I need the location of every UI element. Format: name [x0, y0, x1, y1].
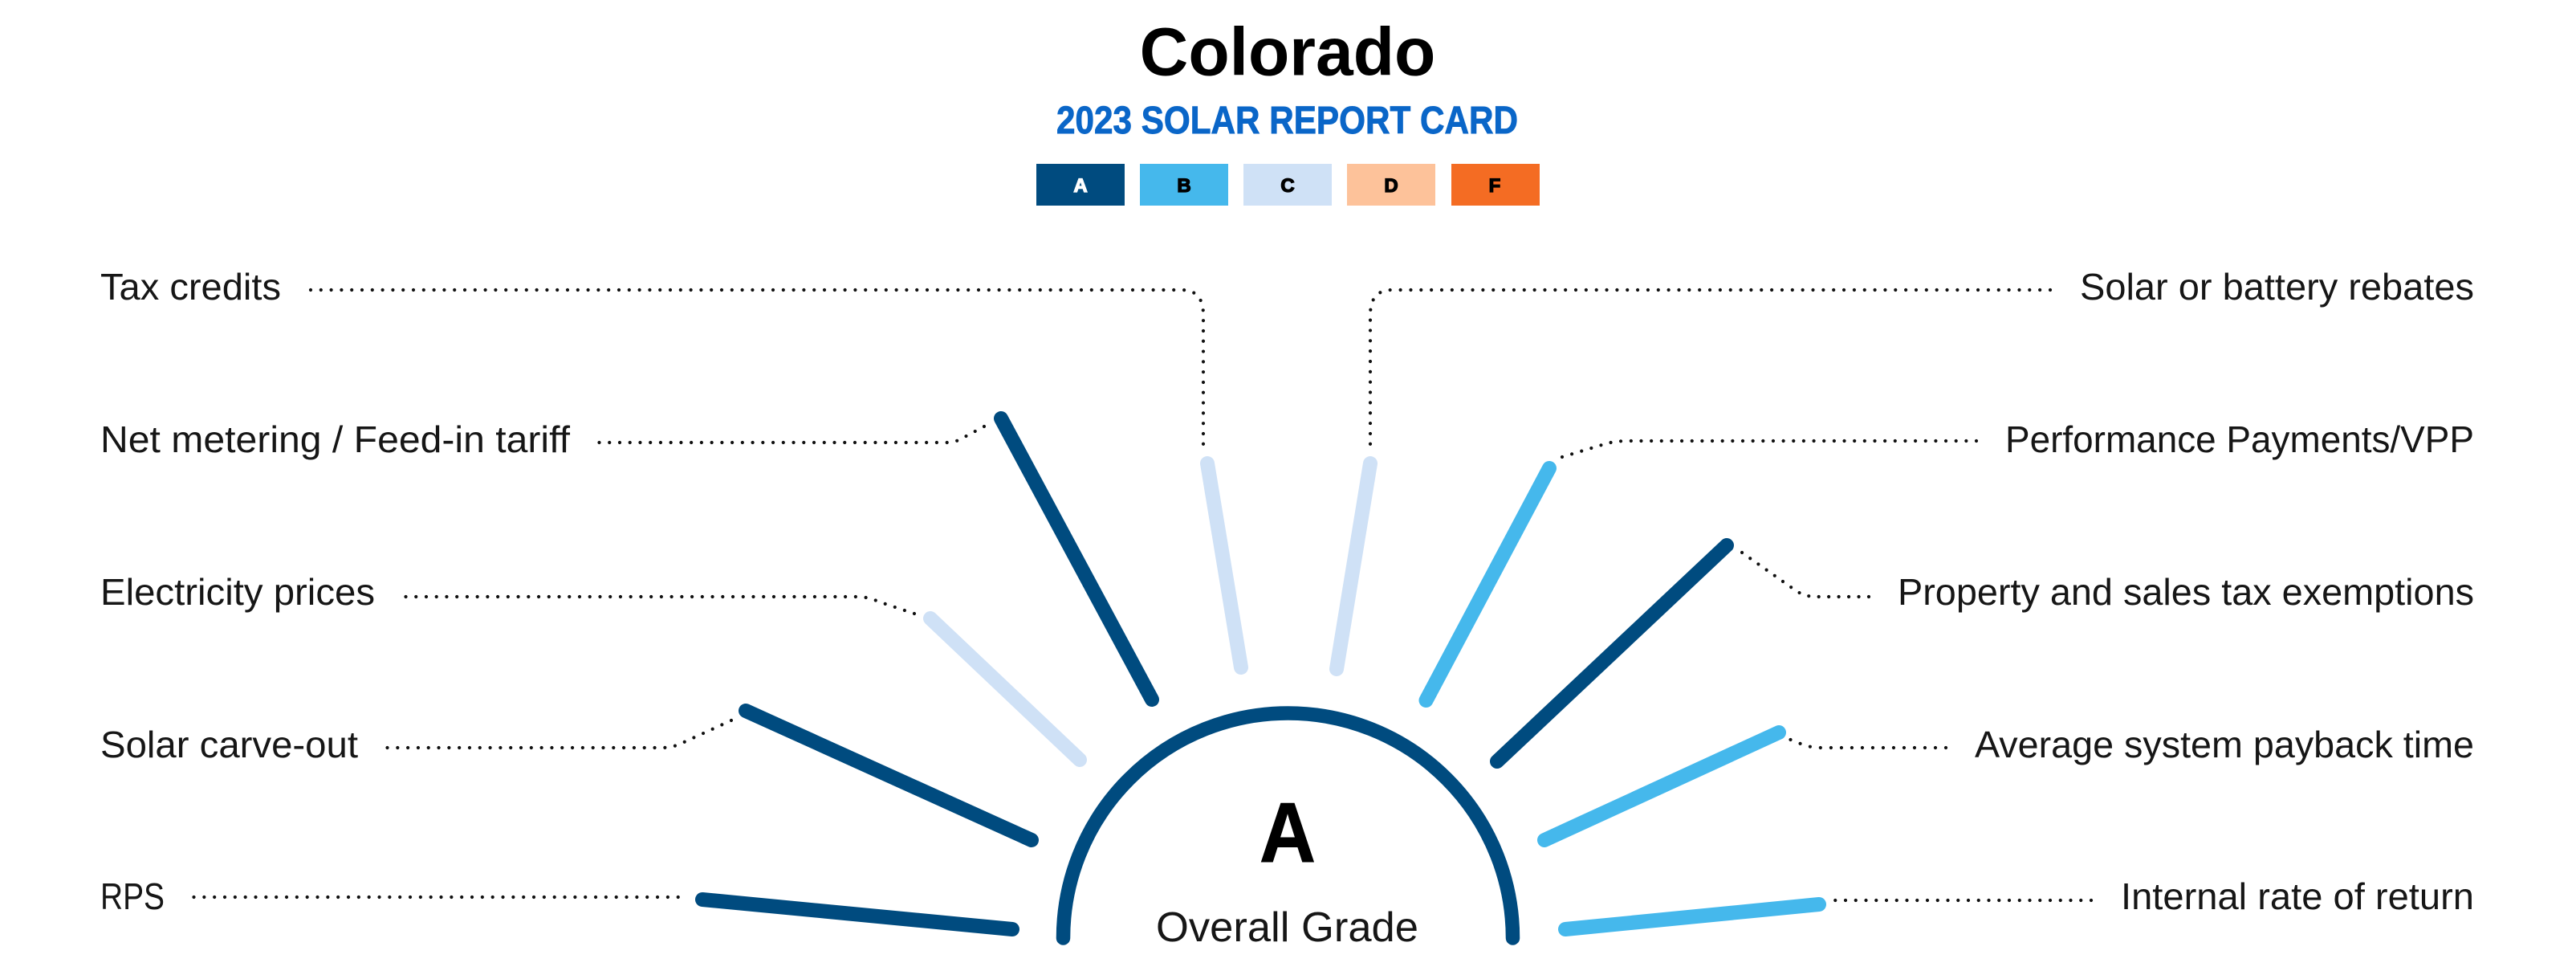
item: Internal rate of return — [1565, 875, 2474, 929]
leader line — [1834, 899, 2091, 902]
legend: A: A — [1073, 175, 1088, 197]
ray: grade B — [1565, 904, 1819, 929]
item: Net metering / Feed-in tariff — [100, 418, 1152, 700]
legend: D: D — [1384, 175, 1398, 197]
leader line — [599, 426, 984, 443]
item: Property and sales tax exemptions — [1497, 545, 2474, 761]
label: Performance Payments/VPP — [2005, 418, 2474, 460]
leader line — [387, 720, 731, 748]
label: Average system payback time — [1975, 724, 2474, 765]
ray: grade A — [1001, 418, 1152, 700]
legend: C: C — [1280, 175, 1295, 197]
label: Internal rate of return — [2121, 875, 2474, 917]
overall grade label: Overall Grade — [1156, 904, 1418, 951]
title: Colorado — [1140, 14, 1435, 90]
item: Performance Payments/VPP — [1426, 418, 2474, 700]
legend: D — [1347, 164, 1435, 206]
leader line — [1742, 553, 1869, 597]
semicircle arc — [1063, 713, 1512, 938]
ray: grade B — [1544, 732, 1779, 840]
label: Tax credits — [100, 266, 281, 308]
legend: B: B — [1177, 175, 1191, 197]
item: Electricity prices — [100, 571, 1080, 760]
label: RPS — [100, 875, 165, 917]
label: Solar carve-out — [100, 724, 358, 765]
leader line — [194, 896, 679, 899]
label: Property and sales tax exemptions — [1898, 571, 2474, 613]
item: RPS — [100, 875, 1012, 929]
legend: A — [1036, 164, 1125, 206]
leader line — [1562, 441, 1976, 457]
ray: grade C — [930, 618, 1080, 760]
label: Net metering / Feed-in tariff — [100, 418, 570, 460]
label: Electricity prices — [100, 571, 375, 613]
legend: C — [1243, 164, 1332, 206]
grade legend — [1036, 164, 1540, 206]
legend: F — [1451, 164, 1540, 206]
ray: grade A — [1497, 545, 1727, 761]
ray: grade C — [1337, 463, 1370, 669]
leader line — [1370, 290, 2050, 444]
leader line — [1790, 740, 1946, 748]
item: Average system payback time — [1544, 724, 2474, 840]
overall grade letter: A — [1260, 785, 1316, 880]
item: Solar or battery rebates — [1337, 266, 2474, 669]
subtitle: 2023 SOLAR REPORT CARD — [1056, 100, 1518, 142]
legend: B — [1140, 164, 1228, 206]
label: Solar or battery rebates — [2080, 266, 2474, 308]
overall grade dial — [1063, 713, 1512, 951]
legend: F: F — [1489, 175, 1500, 197]
ray: grade A — [746, 711, 1032, 840]
ray: grade C — [1207, 463, 1241, 667]
ray: grade A — [702, 900, 1012, 929]
leader line — [406, 597, 914, 614]
item: Solar carve-out — [100, 711, 1032, 840]
leader line — [311, 290, 1203, 444]
item: Tax credits — [100, 266, 1241, 667]
ray: grade B — [1426, 468, 1549, 700]
